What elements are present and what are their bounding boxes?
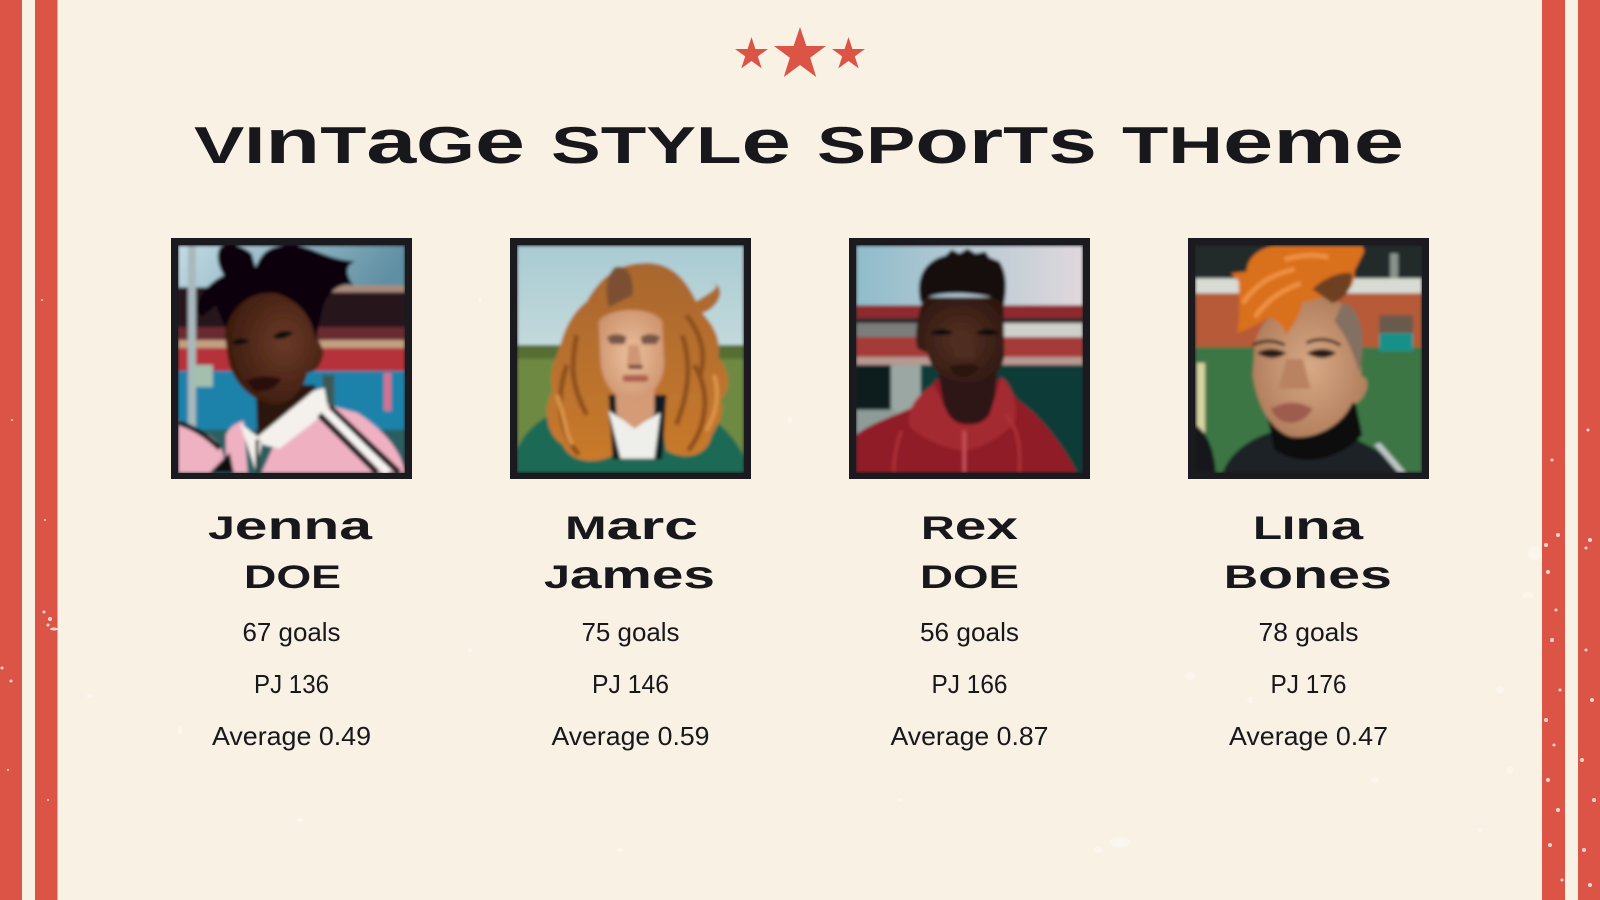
- photo frame: Marc: [510, 238, 751, 479]
- stats: Marc James: [552, 617, 710, 751]
- stats: Jenna Doe: [212, 617, 371, 751]
- portrait: Rex: [856, 245, 1083, 473]
- name: Marc James: James: [544, 554, 715, 597]
- name: Marc James: M arc: [565, 505, 698, 548]
- name: Lina Bones: [1224, 505, 1392, 597]
- left border stripes: [0, 0, 58, 900]
- stats: Jenna Doe: PJ 136: [254, 669, 329, 699]
- title: T H eme: [1122, 108, 1404, 177]
- stats: Rex Doe: PJ 166: [932, 669, 1008, 699]
- stats: Marc James: PJ 146: [592, 669, 669, 699]
- stats: Marc James: Average 0.59: [552, 721, 710, 751]
- name: Jenna Doe: Jenna: [208, 505, 372, 548]
- name: Lina Bones: B ones: [1224, 554, 1392, 597]
- name: Rex Doe: R ex: [921, 505, 1018, 548]
- stats: Lina Bones: PJ 176: [1270, 669, 1346, 699]
- panel: Rex Doe: [849, 238, 1090, 751]
- portrait: Jenna: [178, 245, 405, 473]
- photo frame: Lina: [1188, 238, 1429, 479]
- panel: Jenna Doe: [171, 238, 412, 751]
- panel: Lina Bones: [1188, 238, 1429, 751]
- title: S Por Ts: [817, 108, 1097, 177]
- stats: Marc James: 75 goals: [582, 617, 680, 647]
- photo frame: Rex: [849, 238, 1090, 479]
- stats: Rex Doe: Average 0.87: [890, 721, 1048, 751]
- panel: Marc James: [510, 238, 751, 751]
- name: Jenna Doe: DOE: [244, 559, 341, 595]
- photo frame: Jenna: [171, 238, 412, 479]
- stats: Lina Bones: [1229, 617, 1388, 751]
- name: Rex Doe: DOE: [920, 559, 1019, 595]
- icon: three stars: [735, 27, 865, 77]
- title: [194, 108, 1404, 177]
- right border stripes: [1542, 0, 1600, 900]
- stats: Rex Doe: [890, 617, 1048, 751]
- portrait: Lina: [1195, 245, 1422, 473]
- stats: Jenna Doe: 67 goals: [242, 617, 340, 647]
- name: Lina Bones: L Ina: [1253, 505, 1363, 548]
- stats: Lina Bones: Average 0.47: [1229, 721, 1388, 751]
- title: V In Ta G e: [194, 108, 525, 177]
- portrait: Marc: [517, 245, 744, 473]
- stats: Jenna Doe: Average 0.49: [212, 721, 371, 751]
- stats: Lina Bones: 78 goals: [1258, 617, 1358, 647]
- name: Jenna Doe: [208, 505, 372, 595]
- name: Rex Doe: [920, 505, 1019, 595]
- stats: Rex Doe: 56 goals: [920, 617, 1019, 647]
- name: Marc James: [544, 505, 715, 597]
- title: S TY Le: [551, 108, 791, 177]
